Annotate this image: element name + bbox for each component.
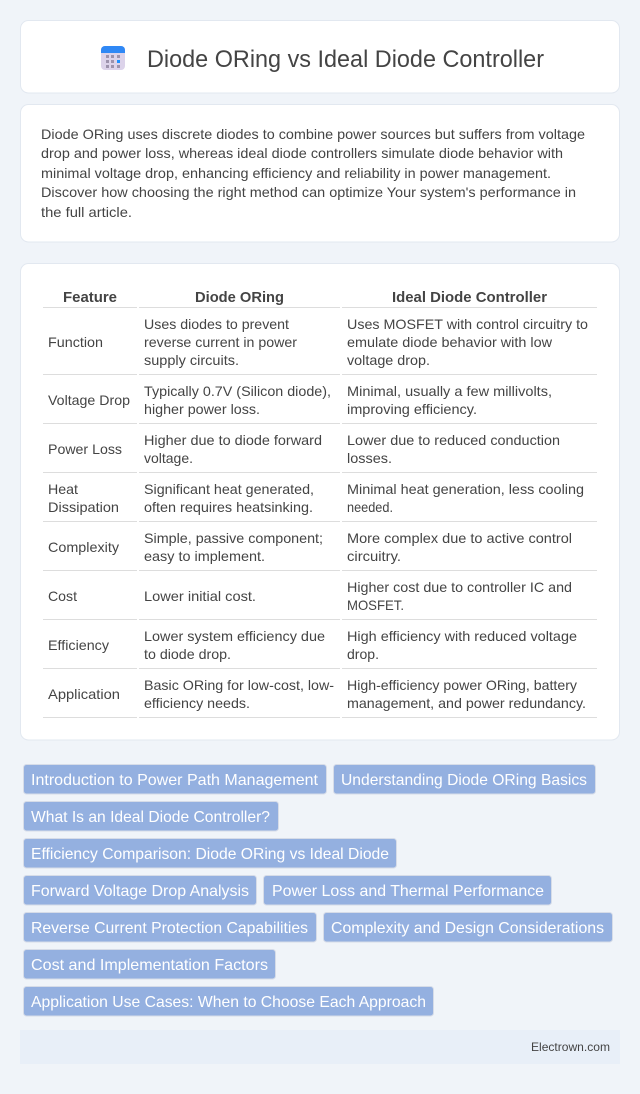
table header row	[43, 289, 597, 308]
table row: Efficiency: to diode drop.	[144, 646, 231, 662]
table row: Application: High-efficiency power ORing, battery	[347, 677, 577, 693]
intro text block: minimal voltage drop, enhancing efficiency and reliability in power management.	[41, 165, 551, 181]
table row: Complexity: Complexity	[48, 539, 119, 555]
table row: Function	[43, 316, 597, 375]
table row: Complexity: circuitry.	[347, 548, 401, 564]
table row: Application: Application	[48, 686, 120, 702]
icon: calendar	[101, 46, 125, 70]
topic tags	[24, 764, 612, 1016]
tag: Application Use Cases	[24, 986, 434, 1016]
panel: header	[20, 20, 620, 93]
table row: Efficiency	[43, 628, 597, 669]
tag: Efficiency Comparison	[24, 838, 396, 868]
table row: Efficiency: High efficiency with reduced voltage	[347, 628, 577, 644]
tag: Efficiency Comparison: Efficiency Comparison: Diode ORing vs Ideal Diode	[31, 846, 389, 863]
table row: Heat Dissipation: Minimal heat generation, less cooling	[347, 481, 584, 497]
panel: introduction	[20, 104, 620, 242]
tag: Power Loss: Power Loss and Thermal Performance	[272, 883, 544, 900]
table row: Application: efficiency needs.	[144, 695, 250, 711]
table row: Power Loss	[43, 432, 597, 473]
table row: Heat Dissipation: Heat	[48, 481, 78, 497]
table row: Cost: Lower initial cost.	[144, 588, 256, 604]
table row: Complexity: More complex due to active control	[347, 530, 572, 546]
table row: Heat Dissipation	[43, 481, 597, 522]
intro text block	[41, 126, 585, 220]
table row: Complexity: easy to implement.	[144, 548, 265, 564]
table row: Power Loss: losses.	[347, 450, 392, 466]
intro text block: Diode ORing uses discrete diodes to combine power sources but suffers from voltage	[41, 126, 585, 142]
tag: Ideal Diode Controller: What Is an Ideal Diode Controller?	[31, 809, 270, 826]
panel: comparison table	[20, 264, 620, 740]
title: Diode ORing vs Ideal Diode Controller	[147, 46, 544, 73]
table row: Voltage Drop: Typically 0.7V (Silicon diode),	[144, 383, 331, 399]
tag: Ideal Diode Controller	[24, 802, 278, 831]
tag: Complexity: Complexity and Design Considerations	[331, 920, 604, 937]
table row: Application: management, and power redundancy.	[347, 695, 586, 711]
tag: Reverse Current	[24, 912, 316, 942]
intro text block: the full article.	[41, 204, 132, 220]
table row: Efficiency: Lower system efficiency due	[144, 628, 325, 644]
tag: Introduction: Introduction to Power Path Management	[31, 772, 319, 789]
table row: Function: Uses diodes to prevent	[144, 316, 289, 332]
table row: Cost: MOSFET.	[347, 597, 404, 613]
tag: Cost: Cost and Implementation Factors	[31, 957, 268, 974]
intro text block: Discover how choosing the right method can optimize Your system's performance in	[41, 184, 576, 200]
table row: Voltage Drop: higher power loss.	[144, 401, 260, 417]
table row: Power Loss: Power Loss	[48, 441, 122, 457]
table row: Complexity	[43, 530, 597, 571]
table row: Voltage Drop: Minimal, usually a few millivolts,	[347, 383, 552, 399]
tag: Application Use Cases: Application Use Cases: When to Choose Each Approach	[31, 994, 426, 1011]
table header row: Ideal Diode Controller	[392, 289, 547, 306]
tag: Cost	[24, 950, 276, 979]
table row: Complexity: Simple, passive component;	[144, 530, 323, 546]
table row: Heat Dissipation: Dissipation	[48, 499, 119, 515]
tag: Diode ORing Basics: Understanding Diode ORing Basics	[341, 772, 587, 789]
table row: Efficiency: Efficiency	[48, 637, 109, 653]
tag: Forward Voltage Drop	[24, 876, 256, 905]
table row: Cost: Cost	[48, 588, 77, 604]
tag: Complexity	[324, 912, 612, 942]
table row: Voltage Drop: improving efficiency.	[347, 401, 477, 417]
table row: Function: reverse current in power	[144, 334, 297, 350]
table row: Function: emulate diode behavior with low	[347, 334, 553, 350]
table row: Voltage Drop: Voltage Drop	[48, 392, 130, 408]
tag: Introduction	[24, 764, 326, 794]
table row: Function: supply circuits.	[144, 352, 239, 368]
intro text block: drop and power loss, whereas ideal diode controllers simulate diode behavior with	[41, 145, 563, 161]
footer: Electrown.com	[531, 1040, 610, 1054]
table row: Function: Function	[48, 334, 103, 350]
table row: Function: voltage drop.	[347, 352, 430, 368]
footer	[20, 1030, 620, 1064]
table row: Power Loss: Higher due to diode forward	[144, 432, 322, 448]
table row: Power Loss: voltage.	[144, 450, 193, 466]
tag: Power Loss	[264, 876, 552, 905]
table row: Cost: Higher cost due to controller IC and	[347, 579, 572, 595]
table row: Heat Dissipation: often requires heatsinking.	[144, 499, 313, 515]
table row: Heat Dissipation: Significant heat generated,	[144, 481, 314, 497]
table header row: Feature	[63, 289, 117, 306]
table row: Power Loss: Lower due to reduced conduction	[347, 432, 560, 448]
table row: Application	[43, 677, 597, 718]
table row: Voltage Drop	[43, 383, 597, 424]
table row: Application: Basic ORing for low-cost, low-	[144, 677, 334, 693]
table header row: Diode ORing	[195, 289, 284, 306]
table row: Efficiency: drop.	[347, 646, 379, 662]
table row: Function: Uses MOSFET with control circuitry to	[347, 316, 588, 332]
table row: Cost	[43, 579, 597, 620]
tag: Reverse Current: Reverse Current Protection Capabilities	[31, 920, 308, 937]
tag: Diode ORing Basics	[334, 764, 596, 794]
table row: Heat Dissipation: needed.	[347, 499, 393, 515]
tag: Forward Voltage Drop: Forward Voltage Drop Analysis	[31, 883, 249, 900]
